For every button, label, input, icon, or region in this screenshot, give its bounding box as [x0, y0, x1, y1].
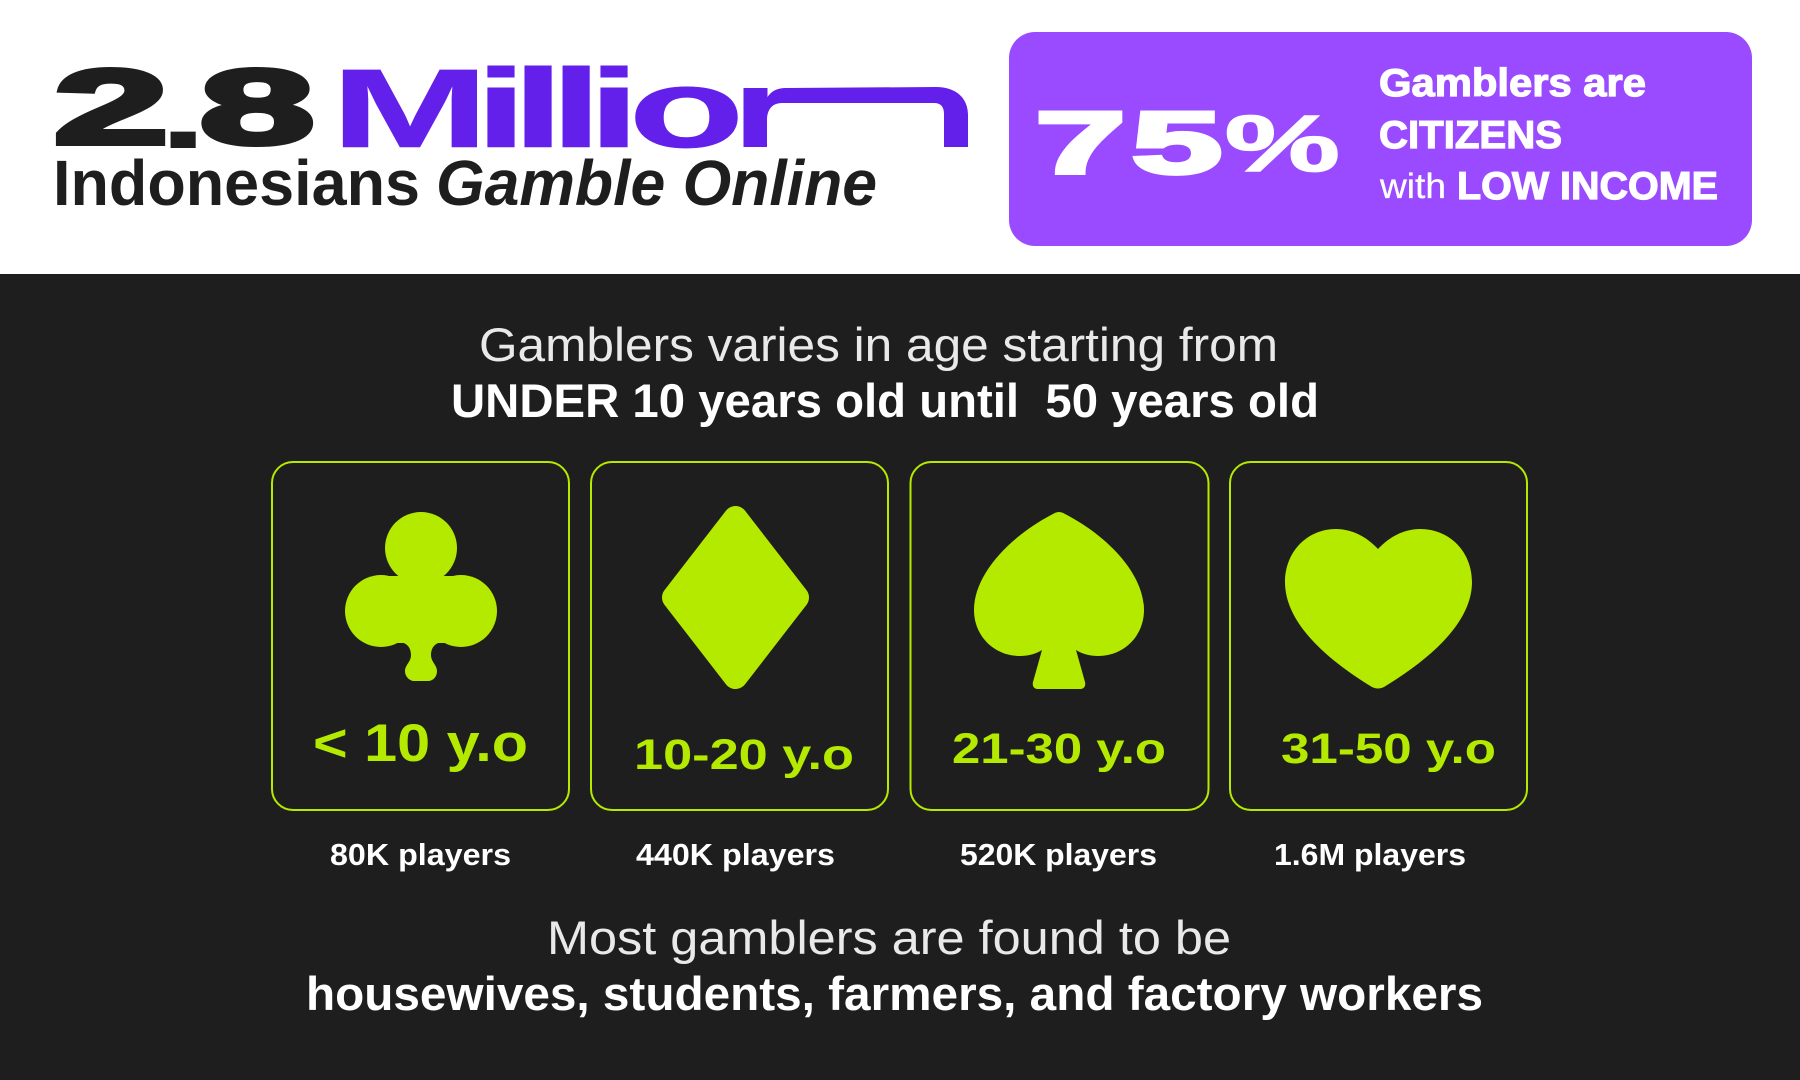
icon: club [345, 512, 497, 681]
callout text: Gamblers are [1379, 62, 1646, 105]
player counts: 440K players [636, 837, 835, 872]
panel: 75 percent callout [1009, 32, 1752, 246]
title number: 2.8: 8 [200, 47, 315, 166]
heading: age range: UNDER 10 years old until 50 years old [451, 374, 1319, 427]
title word: Million: n [725, 46, 793, 171]
panel: under 10 card [272, 462, 569, 810]
footer text: occupations: housewives, students, farmers, and factory workers [306, 967, 1483, 1020]
stat: 75% [1035, 94, 1340, 192]
age label: 31-50 y.o [1281, 725, 1496, 773]
callout text: LOW INCOME [1457, 165, 1718, 208]
title number: 2.8: 2 [54, 47, 169, 166]
icon: diamond [674, 518, 797, 677]
title subline [53, 147, 877, 219]
title subline: Gamble Online [436, 147, 877, 219]
stat: 75%: 75 [1035, 94, 1222, 192]
title word: Million: Millio [331, 47, 745, 171]
heading: age range: Gamblers varies in age starting from [479, 318, 1278, 371]
icon: heart [1285, 529, 1472, 688]
heading: age range [451, 318, 1319, 427]
footer text: occupations: Most gamblers are found to be [547, 911, 1231, 964]
player counts: 80K players [330, 837, 511, 872]
icon: spade [974, 512, 1144, 689]
player counts: 520K players [960, 837, 1157, 872]
callout text [1379, 62, 1718, 208]
panel: 10-20 card [591, 462, 888, 810]
panel: 21-30 card [910, 462, 1208, 810]
title subline: Indonesians [53, 147, 420, 219]
title word: Million [342, 66, 968, 148]
age label: 10-20 y.o [634, 731, 854, 779]
title [56, 66, 968, 206]
player counts: 1.6M players [1274, 837, 1466, 872]
callout text: with [1379, 167, 1446, 206]
panel: dark lower background [0, 274, 1800, 1080]
callout text: CITIZENS [1379, 114, 1562, 157]
age label: < 10 y.o [313, 714, 528, 773]
title number: 2.8: . [163, 66, 203, 166]
footer text: occupations [306, 911, 1483, 1020]
age label: 21-30 y.o [952, 725, 1166, 773]
player counts [330, 837, 1466, 872]
title number: 2.8 [54, 47, 315, 166]
panel: 31-50 card [1230, 462, 1527, 810]
stat: 75%: % [1225, 99, 1340, 188]
